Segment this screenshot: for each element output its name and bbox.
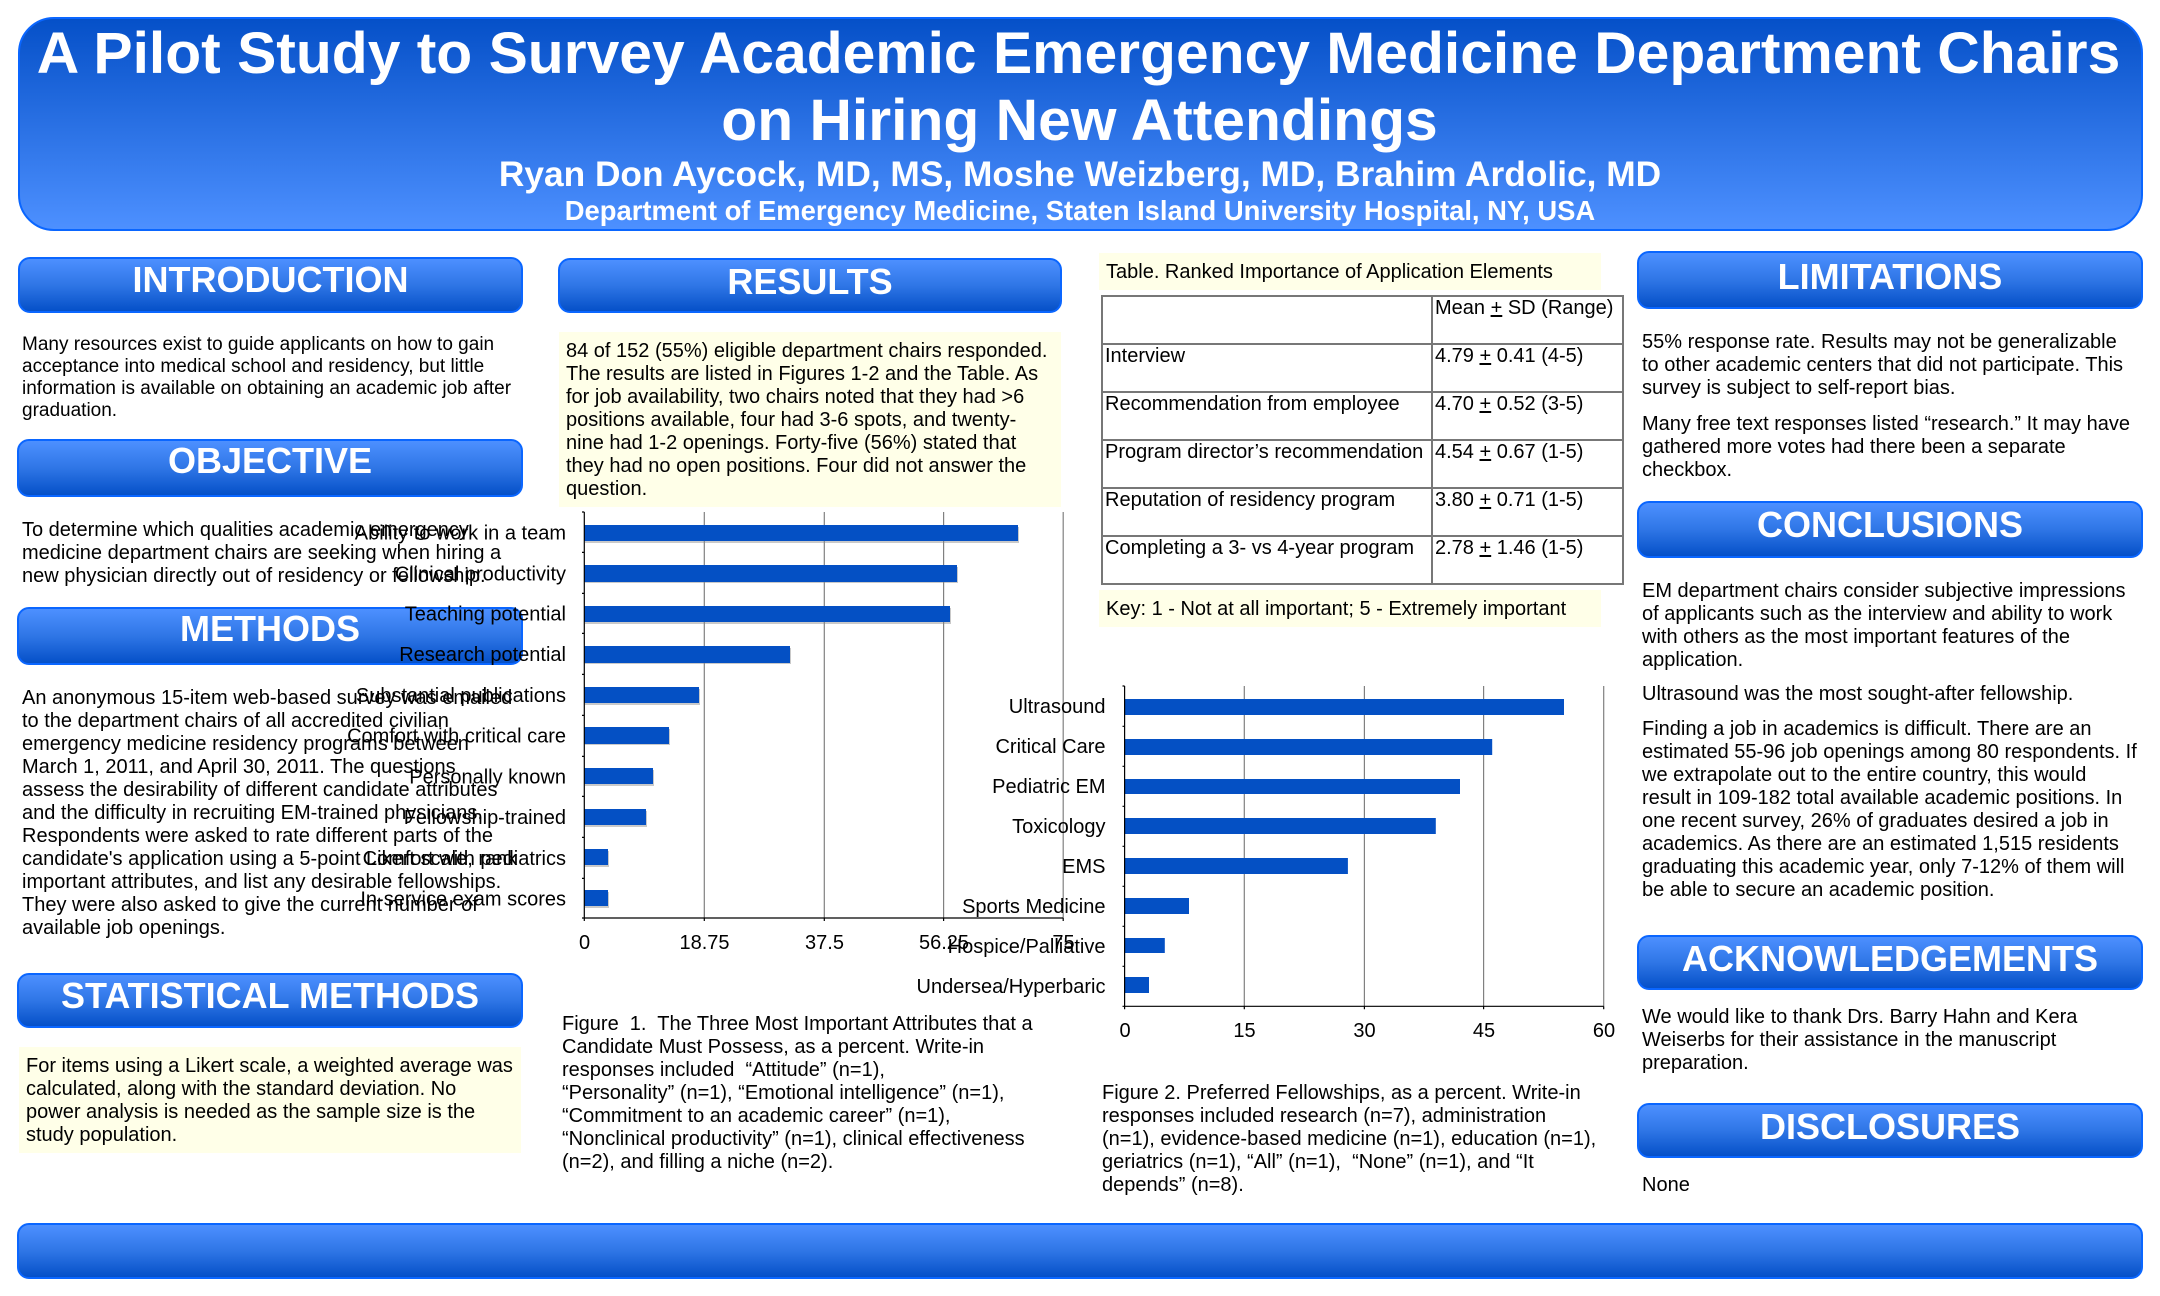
text: methods [22, 687, 518, 939]
axis values: 37.5 [805, 932, 844, 954]
table caption panel [1099, 253, 1601, 290]
heading: objective [17, 439, 523, 497]
axes [1122, 686, 1604, 1009]
category labels [347, 522, 566, 910]
heading: methods [17, 607, 523, 665]
text: objective: medicine department chairs are seeking when hiring a [22, 542, 501, 564]
text panel: results [559, 332, 1061, 507]
table key: Key: 1 - Not at all important; 5 - Extremely important [1106, 598, 1566, 620]
heading: results [558, 258, 1062, 313]
text: conclusions paragraph 1 [1642, 580, 2126, 671]
authors: Ryan Don Aycock, MD, MS, Moshe Weizberg, MD, Brahim Ardolic, MD [499, 155, 1661, 194]
text: conclusions paragraph 1: application. [1642, 649, 1743, 671]
caption: figure 2: depends” (n=8). [1102, 1174, 1244, 1196]
bars [1125, 699, 1564, 993]
text: methods: and the difficulty in recruiting EM-trained physicians. [22, 802, 483, 824]
text: statistical methods: power analysis is needed as the sample size is the [26, 1101, 475, 1123]
text: conclusions paragraph 3: result in 109-182 total available academic positions. In [1642, 787, 2122, 809]
heading: introduction [18, 257, 523, 313]
category labels: Pediatric EM [992, 776, 1106, 798]
caption: figure 1: “Nonclinical productivity” (n=1), clinical effectiveness [562, 1128, 1025, 1150]
text: methods: candidate's application using a 5-point Likert scale, rank [22, 848, 517, 870]
category labels: Comfort with pediatrics [363, 848, 566, 870]
text: results: positions available, four had 3-6 spots, and twenty- [566, 409, 1016, 431]
category labels: Sports Medicine [962, 896, 1106, 918]
affiliation: Department of Emergency Medicine, Staten Island University Hospital, NY, USA [565, 195, 1595, 226]
axis values: 45 [1473, 1020, 1495, 1042]
table: ranked importance: Mean + SD (Range) [1435, 297, 1613, 319]
caption: figure 2: (n=1), evidence-based medicine (n=1), education (n=1), [1102, 1128, 1596, 1150]
text: objective [22, 519, 502, 587]
text: conclusions paragraph 3: graduating this academic year, only 7-12% of them will [1642, 856, 2124, 878]
footer bar [17, 1223, 2143, 1279]
bars [584, 525, 1018, 906]
title banner [18, 17, 2143, 231]
gridlines [704, 512, 1063, 918]
category labels: Ultrasound [1009, 696, 1106, 718]
text: methods: An anonymous 15-item web-based survey was emailed [22, 687, 512, 709]
heading: limitations [1637, 251, 2143, 309]
text: limitations: survey is subject to self-report bias. [1642, 377, 1955, 399]
caption: figure 1: “Commitment to an academic career” (n=1), [562, 1105, 950, 1127]
text: results: nine had 1-2 openings. Forty-five (56%) stated that [566, 432, 1016, 454]
text: methods: available job openings. [22, 917, 226, 939]
category labels: Ability to work in a team [355, 522, 566, 544]
text: results: question. [566, 478, 647, 500]
caption: figure 1 [562, 1013, 1033, 1173]
text: disclosures: None [1642, 1174, 1690, 1196]
text: conclusions paragraph 3: we extrapolate out to the entire country, this would [1642, 764, 2086, 786]
heading: conclusions [1637, 501, 2143, 558]
text: introduction: information is available on obtaining an academic job after [22, 378, 511, 399]
table: ranked importance: 4.54 + 0.67 (1-5) [1435, 441, 1583, 463]
text: methods: emergency medicine residency programs between [22, 733, 469, 755]
axis values: 15 [1233, 1020, 1256, 1042]
table: ranked importance: Reputation of residency program [1105, 489, 1395, 511]
axis values: 18.75 [679, 932, 730, 954]
table: ranked importance: 3.80 + 0.71 (1-5) [1435, 489, 1583, 511]
text: limitations note [1642, 413, 2130, 481]
chart: figure 2 fellowships bar chart [917, 685, 1615, 1042]
title: A Pilot Study to Survey Academic Emergency Medicine Department Chairs [37, 21, 2120, 86]
text: results: they had no open positions. Four did not answer the [566, 455, 1026, 477]
text: introduction: Many resources exist to guide applicants on how to gain [22, 334, 494, 355]
table: ranked importance: 4.79 + 0.41 (4-5) [1435, 345, 1583, 367]
text: results [566, 340, 1047, 500]
heading: statistical methods: STATISTICAL METHODS [61, 975, 479, 1016]
text: introduction: acceptance into medical school and residency, but little [22, 356, 484, 377]
text: acknowledgements: preparation. [1642, 1052, 1749, 1074]
category labels: Substantial publications [356, 685, 566, 707]
text: statistical methods: study population. [26, 1124, 177, 1146]
category labels: Hospice/Palliative [948, 936, 1106, 958]
text: limitations note: Many free text responses listed “research.” It may have [1642, 413, 2130, 435]
category labels: Critical Care [995, 736, 1106, 758]
caption: figure 2 [1102, 1082, 1596, 1196]
text: introduction [22, 334, 511, 421]
caption: figure 1: Figure 1. The Three Most Important Attributes that a [562, 1013, 1033, 1035]
category labels: Research potential [399, 644, 566, 666]
axis values: 60 [1593, 1020, 1615, 1042]
chart: figure 1 attributes bar chart [347, 511, 1075, 954]
text: methods: March 1, 2011, and April 30, 2011. The questions [22, 756, 456, 778]
axis values [579, 932, 1075, 954]
text: limitations: 55% response rate. Results may not be generalizable [1642, 331, 2117, 353]
title line 2: on Hiring New Attendings [721, 88, 1438, 153]
table: ranked importance: 4.70 + 0.52 (3-5) [1435, 393, 1583, 415]
caption: figure 2: responses included research (n=7), administration [1102, 1105, 1546, 1127]
table: ranked importance: Completing a 3- vs 4-year program [1105, 537, 1414, 559]
text: statistical methods: calculated, along with the standard deviation. No [26, 1078, 456, 1100]
text: objective: To determine which qualities academic emergency [22, 519, 469, 541]
caption: figure 1: responses included “Attitude” (n=1), [562, 1059, 885, 1081]
text: results: for job availability, two chairs noted that they had >6 [566, 386, 1024, 408]
heading: acknowledgements [1637, 935, 2143, 990]
text: acknowledgements: We would like to thank Drs. Barry Hahn and Kera [1642, 1006, 2077, 1028]
category labels: Toxicology [1012, 816, 1106, 838]
text: limitations note: checkbox. [1642, 459, 1732, 481]
caption: figure 2: geriatrics (n=1), “All” (n=1), “None” (n=1), and “It [1102, 1151, 1534, 1173]
text: introduction: graduation. [22, 400, 117, 421]
heading: results: RESULTS [727, 261, 893, 302]
heading: methods: METHODS [180, 608, 360, 649]
heading: acknowledgements: ACKNOWLEDGEMENTS [1682, 938, 2098, 979]
category labels: Comfort with critical care [347, 726, 566, 748]
text: conclusions paragraph 1: with others as the most important features of the [1642, 626, 2070, 648]
category labels [917, 696, 1106, 998]
text: conclusions paragraph 3 [1642, 718, 2137, 901]
category labels: In-service exam scores [360, 888, 566, 910]
table key panel [1099, 590, 1601, 627]
text: methods: They were also asked to give the current number of [22, 894, 478, 916]
heading: disclosures [1637, 1103, 2143, 1158]
text: methods: Respondents were asked to rate different parts of the [22, 825, 493, 847]
text: limitations [1642, 331, 2123, 399]
axes [582, 512, 1063, 921]
text: objective: new physician directly out of residency or fellowship. [22, 565, 486, 587]
text panel: statistical methods [19, 1047, 521, 1153]
axis values: 30 [1353, 1020, 1376, 1042]
heading: statistical methods [17, 973, 523, 1028]
text: limitations note: gathered more votes had there been a separate [1642, 436, 2066, 458]
text: conclusions paragraph 3: Finding a job in academics is difficult. There are an [1642, 718, 2092, 740]
category labels: EMS [1062, 856, 1106, 878]
text: methods: assess the desirability of different candidate attributes [22, 779, 497, 801]
caption: figure 1: Candidate Must Possess, as a percent. Write-in [562, 1036, 984, 1058]
text: conclusions paragraph 3: academics. As there are an estimated 1,515 residents [1642, 833, 2119, 855]
text: results: The results are listed in Figures 1-2 and the Table. As [566, 363, 1038, 385]
table: ranked importance: Program director’s recommendation [1105, 441, 1423, 463]
category labels: Undersea/Hyperbaric [917, 976, 1106, 998]
text: conclusions paragraph 3: be able to secure an academic position. [1642, 879, 1994, 901]
heading: conclusions: CONCLUSIONS [1757, 504, 2023, 545]
gridlines [1244, 686, 1604, 1006]
caption: figure 1: (n=2), and filling a niche (n=2). [562, 1151, 833, 1173]
text: conclusions paragraph 3: estimated 55-96 job openings among 80 respondents. If [1642, 741, 2137, 763]
heading: limitations: LIMITATIONS [1778, 256, 2002, 297]
text: conclusions paragraph 2: Ultrasound was the most sought-after fellowship. [1642, 683, 2073, 705]
text: limitations: to other academic centers that did not participate. This [1642, 354, 2123, 376]
table: ranked importance: Interview [1105, 345, 1185, 367]
caption: figure 1: “Personality” (n=1), “Emotional intelligence” (n=1), [562, 1082, 1004, 1104]
table: ranked importance: Recommendation from employee [1105, 393, 1400, 415]
text: acknowledgements [1642, 1006, 2078, 1074]
table caption: Table. Ranked Importance of Application Elements [1106, 261, 1553, 283]
heading: disclosures: DISCLOSURES [1760, 1106, 2020, 1147]
table: ranked importance: 2.78 + 1.46 (1-5) [1435, 537, 1583, 559]
category labels: Teaching potential [405, 604, 566, 626]
text: conclusions paragraph 3: one recent survey, 26% of graduates desired a job in [1642, 810, 2109, 832]
axis values: 0 [579, 932, 590, 954]
text: conclusions paragraph 1: EM department chairs consider subjective impressions [1642, 580, 2126, 602]
axis values [1119, 1020, 1615, 1042]
text: conclusions paragraph 1: of applicants such as the interview and ability to work [1642, 603, 2112, 625]
text: methods: to the department chairs of all accredited civilian [22, 710, 449, 732]
bar shadows [585, 527, 1019, 908]
heading: objective: OBJECTIVE [168, 440, 372, 481]
axis values: 75 [1052, 932, 1075, 954]
table: ranked importance [1101, 295, 1624, 585]
heading: introduction: INTRODUCTION [132, 259, 408, 300]
category labels: Personally known [409, 766, 566, 788]
axis values: 0 [1119, 1020, 1131, 1042]
text: statistical methods [26, 1055, 513, 1146]
caption: figure 2: Figure 2. Preferred Fellowships, as a percent. Write-in [1102, 1082, 1581, 1104]
text: acknowledgements: Weiserbs for their assistance in the manuscript [1642, 1029, 2056, 1051]
text: results: 84 of 152 (55%) eligible department chairs responded. [566, 340, 1047, 362]
category labels: Clinical productivity [395, 564, 566, 586]
text: statistical methods: For items using a Likert scale, a weighted average was [26, 1055, 513, 1077]
text: methods: important attributes, and list any desirable fellowships. [22, 871, 501, 893]
category labels: Fellowship-trained [404, 807, 566, 829]
axis values: 56.25 [919, 932, 969, 954]
